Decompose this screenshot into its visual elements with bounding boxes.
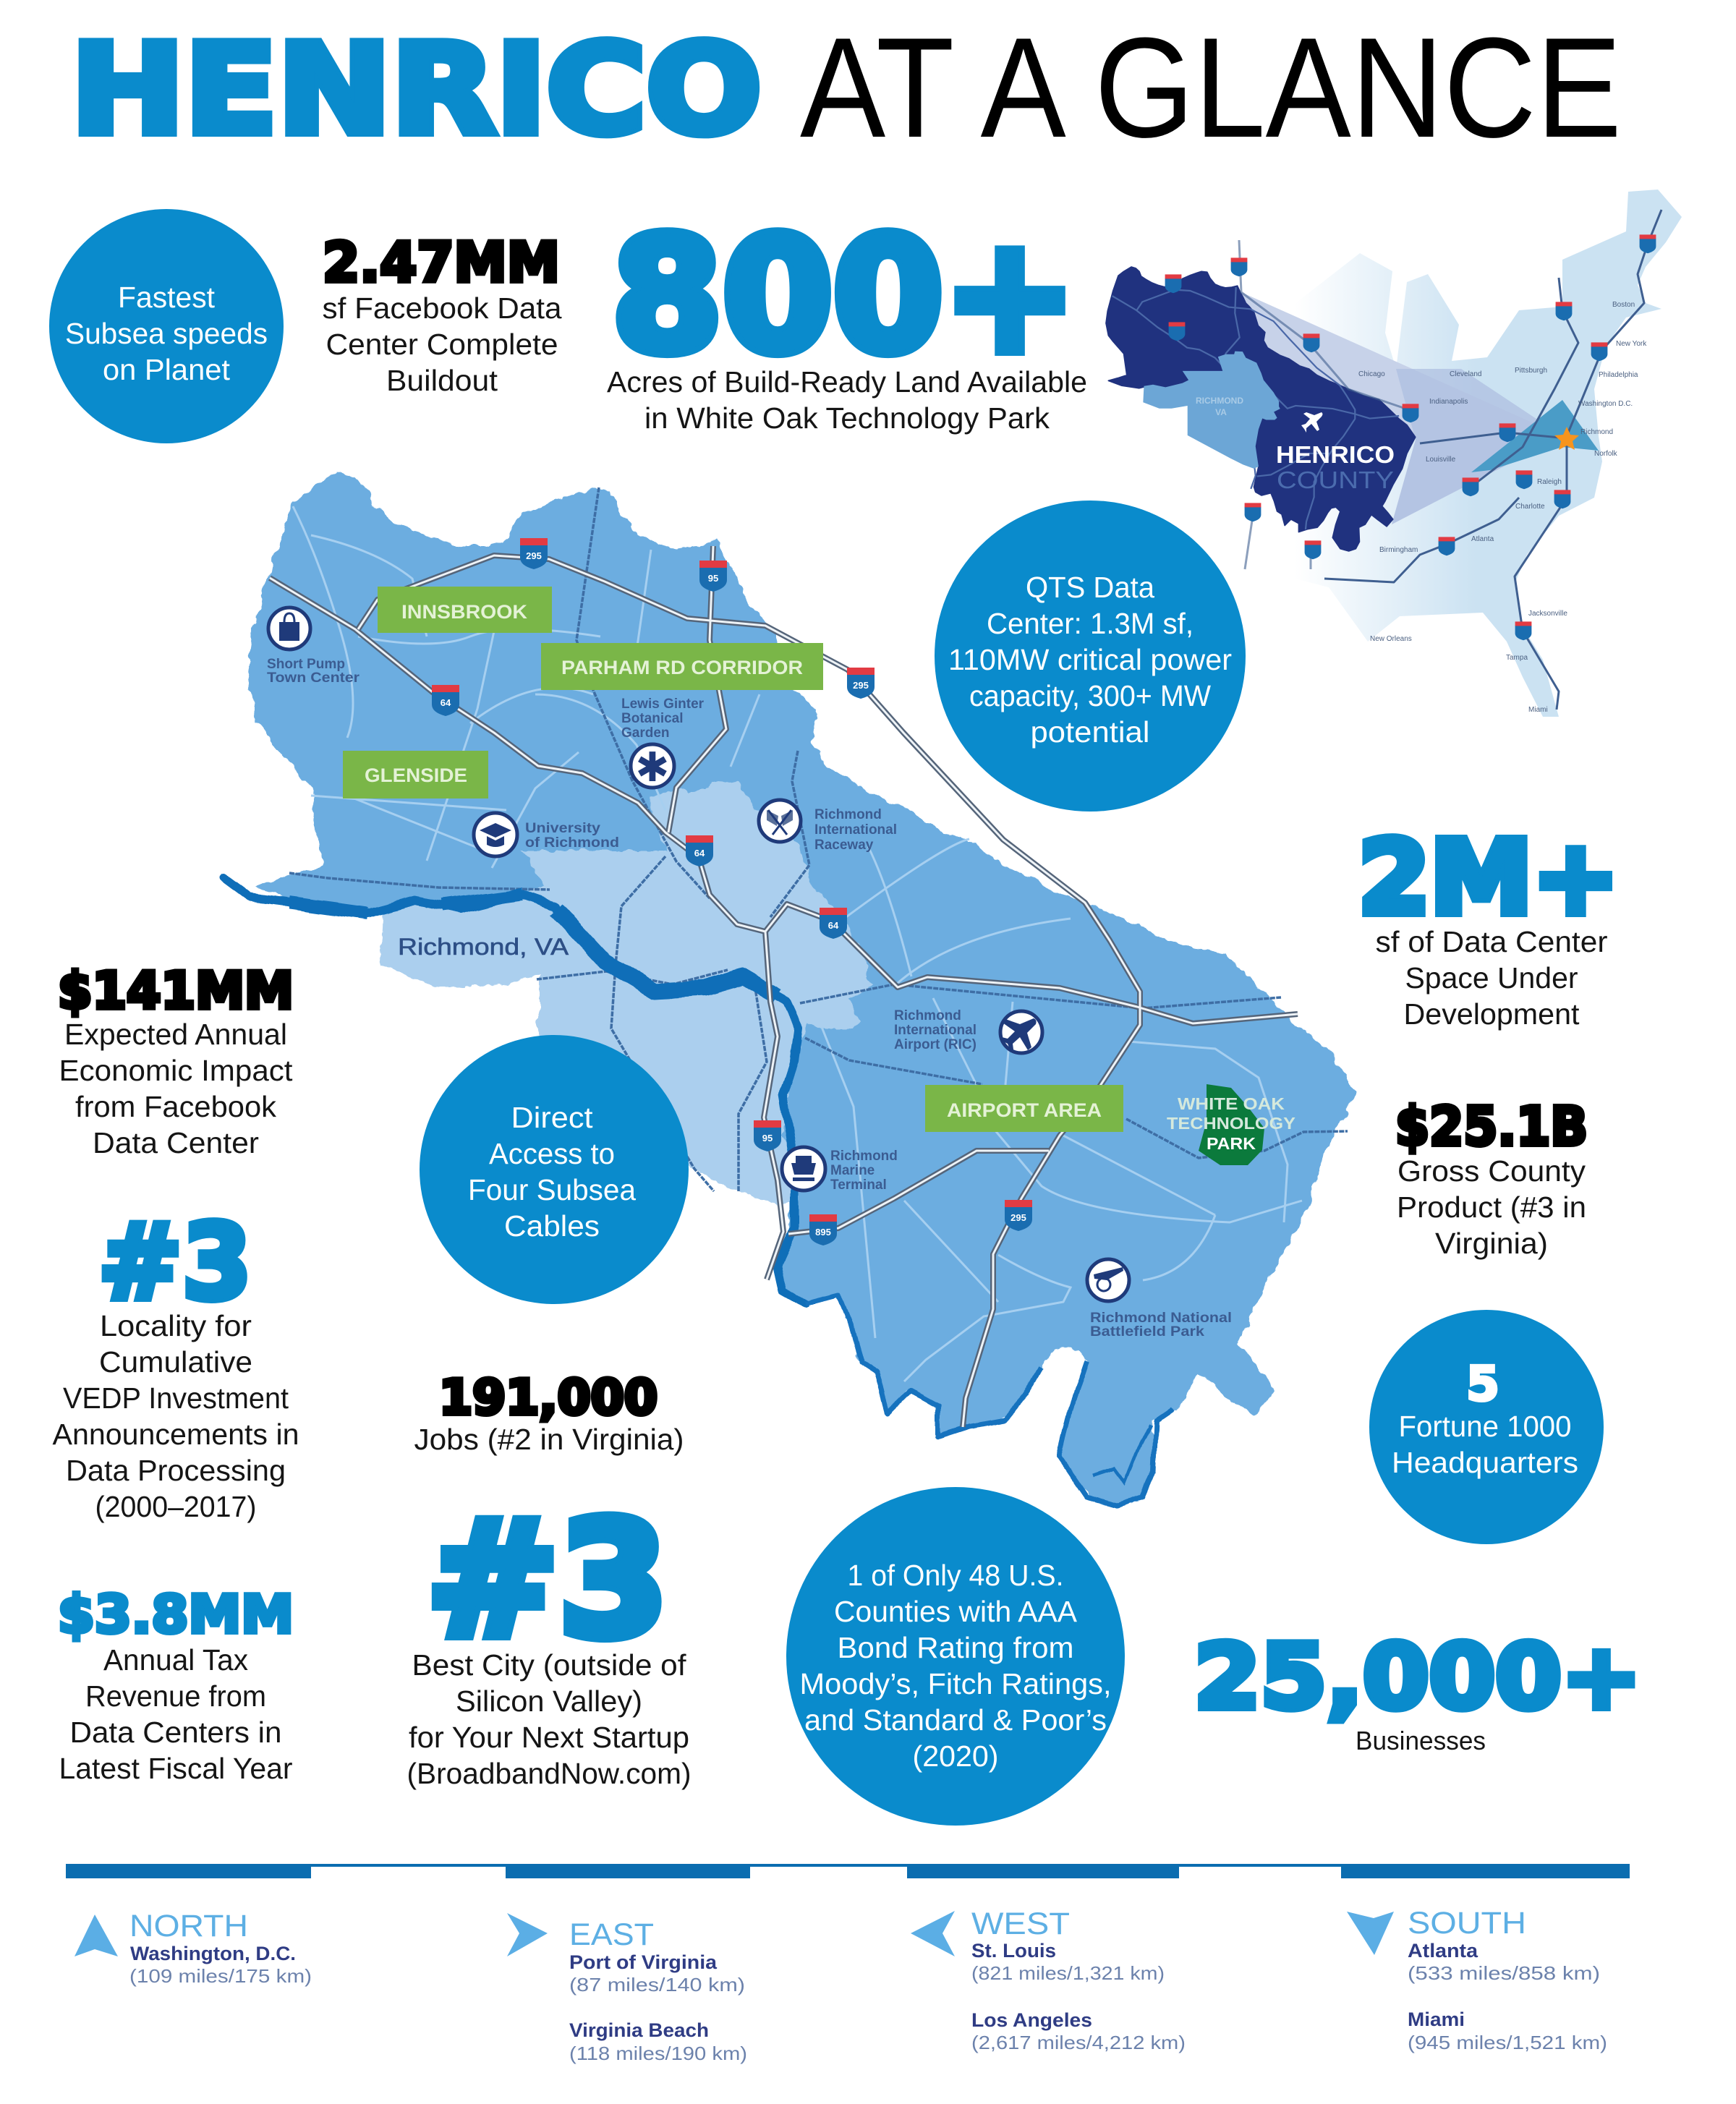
callout: 5 Fortune 1000: 5 <box>1466 1356 1499 1412</box>
city labels: Washington D.C. <box>1578 400 1633 408</box>
callout: fastest subsea speeds: Fastest <box>118 281 216 314</box>
stat: $141MM: $141MM <box>58 961 294 1021</box>
distances: east: (87 miles/140 km) <box>569 1974 745 1996</box>
landmark: Richmond National Battlefield Park: Richmond National <box>1090 1311 1232 1326</box>
city labels: Chicago <box>1358 370 1385 378</box>
distances: north: (109 miles/175 km) <box>129 1965 312 1987</box>
city labels: New York <box>1616 340 1647 348</box>
city labels: Jacksonville <box>1528 610 1567 618</box>
locator shields <box>1165 234 1656 640</box>
stat: $3.8MM: Data Centers in <box>69 1716 282 1749</box>
landmark: Lewis Ginter Botanical Garden: Garden <box>621 725 670 741</box>
city labels: Norfolk <box>1594 450 1618 458</box>
star: Richmond location <box>1554 427 1579 450</box>
city labels: Boston <box>1612 301 1635 309</box>
icon: east arrow <box>507 1913 548 1956</box>
stat: 191,000 jobs: Jobs (#2 in Virginia) <box>414 1423 684 1456</box>
stat: #3 best city: Best City (outside of <box>412 1648 686 1682</box>
distances: east: (118 miles/190 km) <box>569 2043 747 2064</box>
title <box>71 8 1622 167</box>
stat: $141MM: Data Center <box>93 1126 259 1159</box>
stat: 191,000 jobs <box>414 1369 684 1456</box>
callout: fastest subsea speeds: Subsea speeds <box>65 317 268 350</box>
icon: south arrow <box>1347 1912 1394 1955</box>
distances: north: Washington, D.C. <box>130 1943 296 1964</box>
stat: $25.1B: Virginia) <box>1435 1227 1548 1260</box>
city labels: Birmingham <box>1379 546 1418 554</box>
stat: $141MM: from Facebook <box>75 1090 277 1123</box>
city labels: Cleveland <box>1450 370 1481 378</box>
landmark: University of Richmond <box>474 813 619 856</box>
icon: north arrow <box>75 1915 118 1956</box>
stat: 2.47MM: Center Complete <box>326 328 558 361</box>
highway shields: 295 <box>526 550 542 561</box>
distances: east <box>507 1913 747 2064</box>
landmark: Lewis Ginter Botanical Garden: ✱ <box>636 744 669 791</box>
distances: south: Atlanta <box>1408 1940 1478 1962</box>
Virginia highlight <box>1471 400 1599 472</box>
stat: #3 best city: #3 <box>427 1488 668 1672</box>
landmark: Richmond International Raceway: Richmond <box>814 807 882 822</box>
city labels: Richmond <box>1580 428 1613 436</box>
callout: AAA bond rating: Moody’s, Fitch Ratings, <box>800 1667 1111 1700</box>
landmark: Lewis Ginter Botanical Garden: Lewis Ginter <box>621 697 705 712</box>
area label: Parham Rd Corridor <box>541 643 823 690</box>
callout: AAA bond rating: 1 of Only 48 U.S. <box>848 1559 1063 1592</box>
highway shields: 95 <box>762 1133 773 1143</box>
projection wedge <box>1241 292 1562 524</box>
White Oak Technology Park: PARK <box>1207 1134 1256 1153</box>
landmark: Richmond Marine Terminal: Marine <box>830 1163 875 1178</box>
landmark: Short Pump Town Center: Town Center <box>267 670 360 686</box>
stat: #3 locality <box>52 1201 299 1523</box>
distances: west: (821 miles/1,321 km) <box>971 1962 1165 1984</box>
stat: $3.8MM: Annual Tax <box>103 1643 248 1677</box>
city labels: Atlanta <box>1471 535 1494 543</box>
distances: north: NORTH <box>129 1909 248 1943</box>
stat: 800+ acres: Acres of Build-Ready Land Available <box>607 365 1087 399</box>
area label: Airport Area: AIRPORT AREA <box>947 1099 1102 1121</box>
callout: QTS data center: QTS Data <box>1026 571 1154 604</box>
stat: 800+ acres: 800+ <box>612 205 1076 388</box>
Henrico County on locator <box>1106 267 1416 551</box>
stat: #3 locality: Cumulative <box>99 1345 252 1379</box>
city labels: Indianapolis <box>1429 398 1468 406</box>
landmark: Richmond Marine Terminal: Terminal <box>830 1177 887 1193</box>
rail lines <box>289 487 1348 1191</box>
highway shields: 64 <box>828 920 839 931</box>
stat: $3.8MM: $3.8MM <box>58 1584 294 1645</box>
distances: west: St. Louis <box>971 1940 1056 1962</box>
title word: Henrico: HENRICO <box>71 18 762 162</box>
Richmond area on locator <box>1143 352 1280 469</box>
landmark: Richmond International Airport: Airport (RIC) <box>894 1037 977 1052</box>
distances: south <box>1347 1906 1607 2053</box>
callout: 5 Fortune 1000: Fortune 1000 <box>1399 1410 1571 1443</box>
area label: Innsbrook: INNSBROOK <box>401 601 528 623</box>
stat: #3 best city: (BroadbandNow.com) <box>407 1757 692 1790</box>
callout: direct access to subsea cables <box>420 1035 689 1304</box>
James River <box>225 878 1172 1506</box>
label: Henrico County: HENRICO <box>1276 441 1395 468</box>
area label: Parham Rd Corridor: PARHAM RD CORRIDOR <box>561 657 803 678</box>
highway shields: 295 <box>853 680 869 691</box>
distances: south: Miami <box>1408 2009 1465 2030</box>
area label: Glenside <box>343 751 488 798</box>
city labels: Charlotte <box>1515 503 1545 511</box>
landmark: Richmond Marine Terminal <box>782 1147 898 1193</box>
highway shields: 64 <box>694 848 705 859</box>
stat: #3 locality: (2000–2017) <box>95 1490 256 1523</box>
highway shields: 64 <box>441 697 451 708</box>
city labels: Louisville <box>1426 456 1456 464</box>
light roads <box>293 506 1302 1381</box>
distances: east: EAST <box>569 1917 654 1952</box>
distances: west <box>911 1907 1186 2053</box>
stat: 2M+: Space Under <box>1405 961 1578 994</box>
callout: 5 Fortune 1000: Headquarters <box>1392 1446 1578 1479</box>
stat: #3 locality: Announcements in <box>52 1418 299 1451</box>
distances: north <box>75 1909 312 1987</box>
stat: 2M+: Development <box>1403 997 1580 1031</box>
stat: 25,000+ businesses: 25,000+ <box>1194 1626 1641 1729</box>
stat: #3 best city: Silicon Valley) <box>456 1685 642 1718</box>
city labels: RICHMOND <box>1196 396 1243 406</box>
city labels: VA <box>1215 407 1227 417</box>
callout: QTS data center: potential <box>1030 715 1150 749</box>
stat: 2M+: 2M+ <box>1358 819 1619 937</box>
callout: direct access to subsea cables: Cables <box>504 1209 600 1243</box>
title words: at a glance: AT A GLANCE <box>800 8 1622 167</box>
callout: fastest subsea speeds <box>49 209 284 443</box>
landmark: Richmond Marine Terminal: Richmond <box>830 1149 898 1164</box>
stat: 2M+: sf of Data Center <box>1376 925 1607 958</box>
callout: AAA bond rating: and Standard & Poor’s <box>804 1703 1107 1737</box>
stat: #3 locality: #3 <box>98 1201 252 1323</box>
White Oak Technology Park: WHITE OAK <box>1178 1094 1285 1113</box>
area label: Glenside: GLENSIDE <box>365 764 467 786</box>
landmark: Short Pump Town Center <box>267 608 360 686</box>
distances: west: (2,617 miles/4,212 km) <box>971 2032 1186 2053</box>
stat: $25.1B: Gross County <box>1397 1154 1586 1188</box>
city labels <box>1196 301 1647 714</box>
landmark: Richmond International Raceway: Raceway <box>814 838 874 853</box>
callout: AAA bond rating <box>786 1487 1125 1826</box>
stat: $141MM: Expected Annual <box>64 1018 287 1051</box>
landmark: Richmond International Raceway: International <box>814 822 897 838</box>
stat: #3 locality: Data Processing <box>66 1454 286 1487</box>
stat: 2.47MM <box>323 230 562 397</box>
distances: east: Virginia Beach <box>569 2019 709 2041</box>
stat: 25,000+ businesses: Businesses <box>1356 1726 1486 1755</box>
stat: $3.8MM: Latest Fiscal Year <box>59 1752 292 1785</box>
city labels: Pittsburgh <box>1515 367 1547 375</box>
distances: east: Port of Virginia <box>569 1951 718 1973</box>
stat: #3 locality: VEDP Investment <box>63 1381 289 1415</box>
interstates <box>1239 210 1661 710</box>
callout: QTS data center <box>935 501 1246 812</box>
White Oak Technology Park <box>1167 1084 1295 1165</box>
distances: west: Los Angeles <box>971 2009 1092 2031</box>
highway shields: 295 <box>1010 1212 1026 1223</box>
landmark: Richmond International Airport: Richmond <box>894 1008 961 1023</box>
stat: #3 best city: for Your Next Startup <box>409 1721 689 1754</box>
stat: 2.47MM: sf Facebook Data <box>323 291 562 325</box>
callout: direct access to subsea cables: Four Subsea <box>468 1173 636 1206</box>
stat: $25.1B: Product (#3 in <box>1397 1191 1586 1224</box>
city labels: Raleigh <box>1537 478 1562 486</box>
landmark: Richmond International Airport: International <box>894 1023 977 1038</box>
stat: $141MM <box>58 961 294 1159</box>
callout: fastest subsea speeds: on Planet <box>103 353 231 386</box>
distances: south: SOUTH <box>1408 1906 1526 1941</box>
highway shields: 95 <box>708 573 718 584</box>
callout: AAA bond rating: Counties with AAA <box>834 1595 1078 1628</box>
stat: 2.47MM: 2.47MM <box>323 230 560 294</box>
county shape <box>247 472 1356 1506</box>
stat: 2.47MM: Buildout <box>386 364 498 397</box>
stat: #3 locality: Locality for <box>100 1309 252 1342</box>
callout: AAA bond rating: (2020) <box>913 1739 998 1773</box>
city labels: New Orleans <box>1370 635 1412 643</box>
city labels: Tampa <box>1506 654 1528 662</box>
label: Henrico County <box>1276 441 1395 493</box>
landmark: Richmond International Airport <box>894 1008 1042 1053</box>
landmark: Richmond International Raceway <box>759 800 897 853</box>
main map: Henrico County <box>225 472 1356 1506</box>
stat: #3 best city <box>407 1488 692 1790</box>
label: Henrico County: COUNTY <box>1277 467 1394 493</box>
city labels: Philadelphia <box>1599 371 1638 379</box>
stat: $3.8MM: Revenue from <box>85 1679 266 1713</box>
highway shields: 895 <box>815 1227 831 1238</box>
callout: QTS data center: 110MW critical power <box>948 643 1232 676</box>
callout: AAA bond rating: Bond Rating from <box>838 1631 1073 1664</box>
stat: $25.1B: $25.1B <box>1395 1096 1588 1158</box>
highway shields <box>432 538 1032 1245</box>
callout: direct access to subsea cables: Access to <box>489 1137 615 1170</box>
icon: west arrow <box>911 1911 955 1956</box>
landmark: Richmond National Battlefield Park <box>1087 1259 1232 1340</box>
area label: Airport Area <box>925 1085 1123 1132</box>
eastern US silhouette <box>1295 189 1682 717</box>
Richmond city area <box>380 779 872 1206</box>
distance bar <box>66 1864 1630 1878</box>
stat: 800+ acres: in White Oak Technology Park <box>644 401 1050 435</box>
callout: 5 Fortune 1000 <box>1369 1310 1604 1544</box>
landmark: University of Richmond: of Richmond <box>525 835 619 851</box>
stat: $25.1B <box>1395 1096 1588 1260</box>
stat: 2M+ <box>1358 819 1619 1031</box>
distances: west: WEST <box>971 1907 1070 1941</box>
city label: Richmond, VA: Richmond, VA <box>398 934 569 960</box>
landmark: Lewis Ginter Botanical Garden <box>621 697 705 791</box>
stat: $3.8MM <box>58 1584 294 1785</box>
callout: QTS data center: capacity, 300+ MW <box>969 679 1211 712</box>
landmark: Short Pump Town Center: Short Pump <box>267 657 345 672</box>
landmark: University of Richmond: University <box>525 821 600 836</box>
callout: QTS data center: Center: 1.3M sf, <box>987 607 1194 640</box>
US east coast locator map <box>1106 189 1682 717</box>
callout: direct access to subsea cables: Direct <box>511 1101 593 1134</box>
distances: south: (945 miles/1,521 km) <box>1408 2032 1607 2053</box>
highways <box>270 546 1298 1427</box>
city labels: Miami <box>1528 706 1548 714</box>
distances: south: (533 miles/858 km) <box>1408 1962 1600 1984</box>
landmark: Richmond National Battlefield Park: Battlefield Park <box>1090 1324 1204 1340</box>
landmark: Lewis Ginter Botanical Garden: Botanical <box>621 711 684 726</box>
stat: 191,000 jobs: 191,000 <box>439 1369 658 1426</box>
area label: Innsbrook <box>378 587 552 633</box>
stat: $141MM: Economic Impact <box>59 1054 293 1087</box>
icon: plane <box>1301 412 1322 433</box>
White Oak Technology Park: TECHNOLOGY <box>1167 1114 1295 1133</box>
